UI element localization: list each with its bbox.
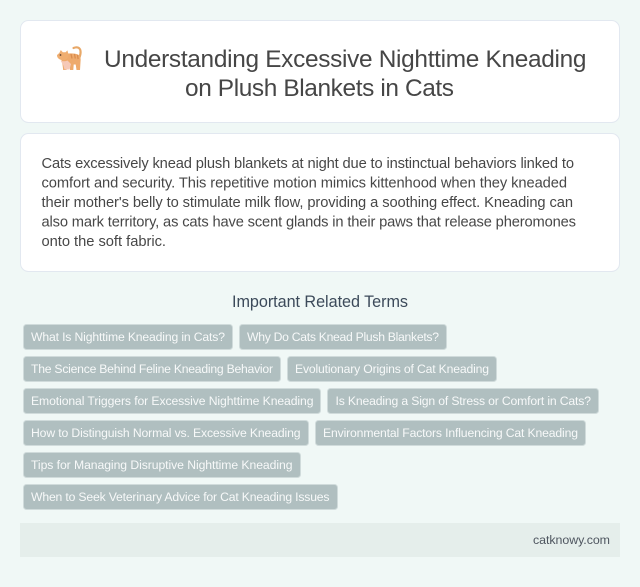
tag <box>24 356 280 382</box>
panel: description card <box>20 134 620 272</box>
tag: Why Do Cats Knead Plush Blankets? <box>247 330 439 344</box>
tag: Evolutionary Origins of Cat Kneading <box>295 362 489 376</box>
tag <box>24 484 338 510</box>
tag <box>288 356 496 382</box>
tag <box>328 388 598 414</box>
footer <box>20 523 620 557</box>
text block: description: also mark territory, as cats have scent glands in their paws that release pheromones <box>42 214 576 230</box>
tag: Tips for Managing Disruptive Nighttime Kneading <box>31 458 292 472</box>
text block: description <box>42 156 576 250</box>
tag: Environmental Factors Influencing Cat Kneading <box>323 426 578 440</box>
tag: When to Seek Veterinary Advice for Cat Kneading Issues <box>31 490 330 504</box>
text block: description: onto the soft fabric. <box>42 234 166 250</box>
tag <box>24 452 300 478</box>
panel: title card <box>20 20 620 122</box>
tag: The Science Behind Feline Kneading Behavior <box>31 362 273 376</box>
text block: description: Cats excessively knead plush blankets at night due to instinctual behaviors linked to <box>42 156 574 172</box>
tag <box>24 420 308 446</box>
footer: site name: catknowy.com <box>533 533 610 547</box>
heading: related terms: Important Related Terms <box>232 293 408 311</box>
tag <box>240 324 446 350</box>
text block: description: their mother's belly to stimulate milk flow, providing a soothing effect. Kneading can <box>42 195 573 211</box>
tag <box>316 420 586 446</box>
title: on Plush Blankets in Cats <box>185 75 454 102</box>
tag: What Is Nighttime Kneading in Cats? <box>31 330 225 344</box>
tag <box>24 324 232 350</box>
tag: Is Kneading a Sign of Stress or Comfort in Cats? <box>336 394 591 408</box>
tag <box>24 388 320 414</box>
tag list: related terms <box>24 324 598 510</box>
text block: description: comfort and security. This repetitive motion mimics kittenhood when they kneaded <box>42 176 567 192</box>
title: Understanding Excessive Nighttime Kneading <box>104 46 586 73</box>
tag: Emotional Triggers for Excessive Nighttime Kneading <box>31 394 314 408</box>
icon: cat <box>57 47 81 70</box>
title <box>104 46 586 102</box>
tag: How to Distinguish Normal vs. Excessive Kneading <box>31 426 300 440</box>
